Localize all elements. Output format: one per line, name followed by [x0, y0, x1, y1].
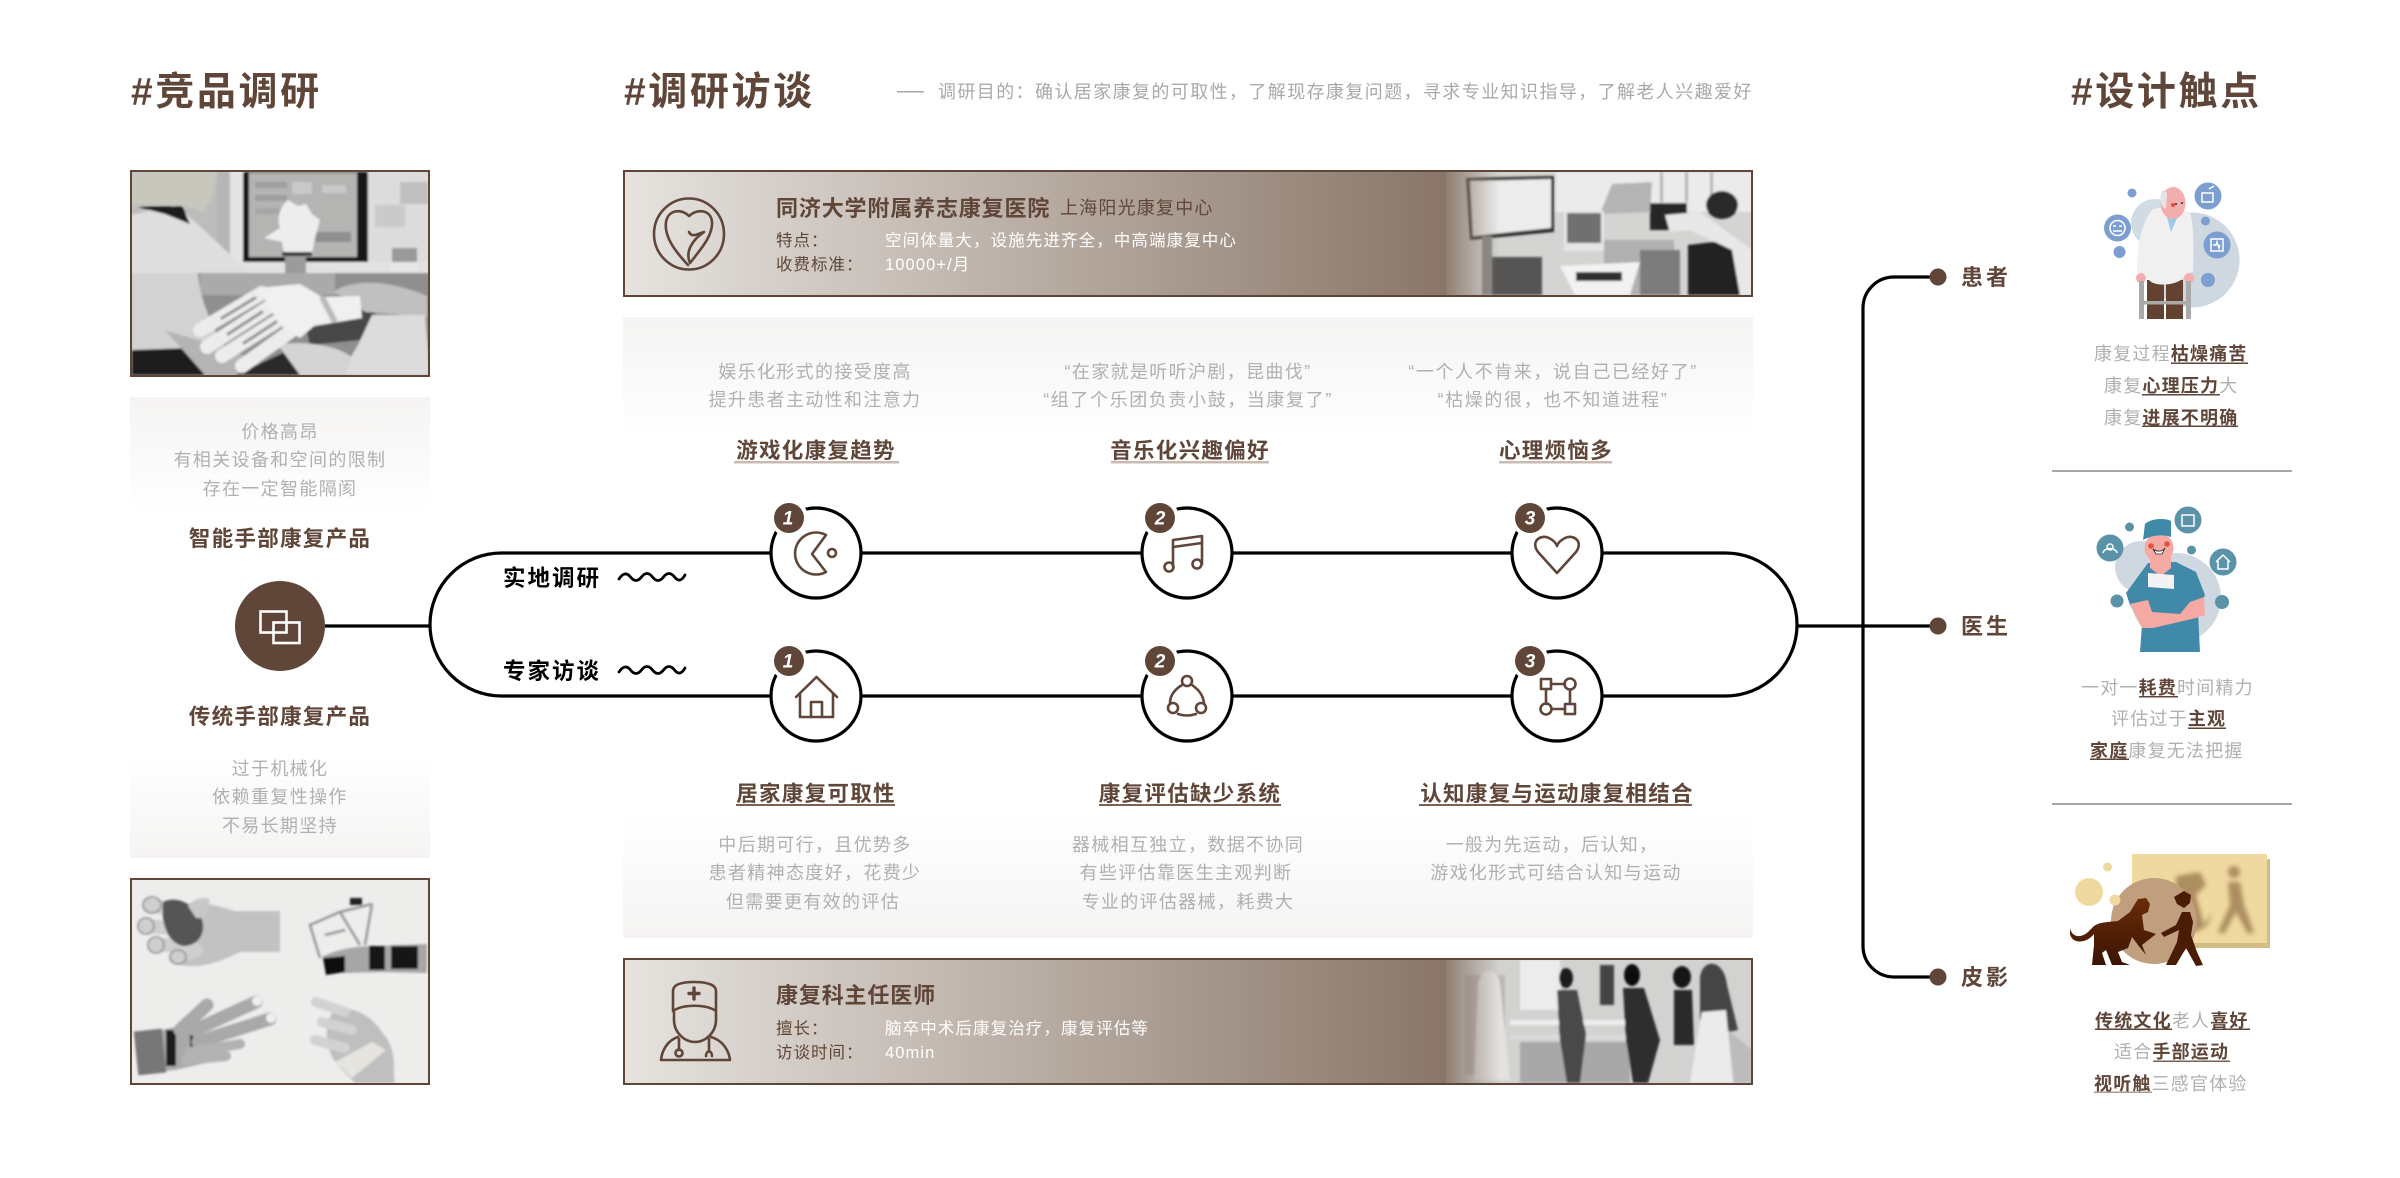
- panel: traditional product drawbacks: [130, 758, 430, 858]
- text: interview finding 2: 专业的评估器械，耗费大: [1082, 892, 1294, 912]
- text: shadow puppetry benefits: 适合手部运动: [2114, 1041, 2229, 1062]
- text: shadow puppetry benefits: 传统文化老人喜好: [2095, 1010, 2249, 1031]
- panel: field research findings background: [623, 317, 1753, 437]
- node: heart icon 3: 3: [1525, 508, 1536, 530]
- text: shadow puppetry benefits: 视听触三感官体验: [2094, 1074, 2248, 1094]
- illustration: doctor with crossed arms: [2096, 506, 2236, 652]
- text: traditional product drawbacks: [212, 759, 348, 836]
- text: field finding 1: 游戏化康复趋势: [736, 438, 896, 463]
- heading: competitor research: #竞品调研: [131, 71, 322, 114]
- node: flow nodes icon 3: 3: [1525, 652, 1536, 672]
- text: doctor pain points: 一对一耗费时间精力: [2081, 678, 2254, 698]
- node: house icon 1: 1: [783, 652, 793, 672]
- text: interview finding 1: 居家康复可取性: [736, 781, 896, 806]
- text: interview finding 2: 有些评估靠医生主观判断: [1080, 863, 1292, 883]
- text: traditional product drawbacks: 不易长期坚持: [222, 816, 338, 836]
- label: shadow puppetry: [1930, 965, 2011, 990]
- photo: smart hand rehab gloves: [130, 170, 430, 377]
- node: game icon 1: 1: [783, 508, 793, 530]
- text: doctor pain points: [2081, 678, 2254, 761]
- text: field finding 2: “在家就是听听沪剧，昆曲伐”: [1065, 362, 1311, 382]
- node: cycle icon 2: [1141, 642, 1232, 741]
- text: patient pain points: 康复心理压力大: [2104, 376, 2238, 396]
- node: cycle icon 2: 2: [1154, 652, 1166, 672]
- text: field finding 1: 提升患者主动性和注意力: [709, 390, 921, 410]
- text: interview finding 1: 但需要更有效的评估: [726, 892, 900, 912]
- text: smart product drawbacks: 价格高昂: [241, 422, 319, 442]
- text: interview finding 2: [1072, 781, 1304, 912]
- node: music icon 2: [1141, 499, 1232, 598]
- label: patient: 患者: [1961, 265, 2011, 290]
- illustration: elderly patient with walker: [2104, 182, 2240, 319]
- text: field finding 2: [1043, 362, 1333, 464]
- label: field research: 实地调研: [503, 565, 601, 591]
- text: hospital name and details: 同济大学附属养志康复医院: [776, 196, 1050, 221]
- text: director details: 擅长：: [776, 1019, 828, 1038]
- text: hospital name and details: 收费标准：: [776, 255, 864, 274]
- node: heart icon 3: [1511, 499, 1602, 598]
- text: hospital name and details: 10000+/月: [885, 256, 970, 274]
- label: traditional hand rehab products: 传统手部康复产品: [189, 704, 371, 729]
- label: field research: [503, 565, 685, 591]
- text: director details: 访谈时间：: [776, 1043, 864, 1062]
- text: smart product drawbacks: 有相关设备和空间的限制: [174, 450, 386, 470]
- icon: doctor: [661, 982, 730, 1060]
- text: hospital name and details: 空间体量大，设施先进齐全，中高端康复中心: [885, 231, 1237, 250]
- text: hospital name and details: 上海阳光康复中心: [1060, 198, 1214, 218]
- text: shadow puppetry benefits: [2094, 1010, 2250, 1094]
- text: interview finding 1: 中后期可行，且优势多: [718, 835, 912, 855]
- icon: heart logo: [654, 198, 724, 270]
- text: interview finding 3: 认知康复与运动康复相结合: [1420, 781, 1694, 806]
- text: interview finding 3: [1419, 781, 1694, 883]
- text: smart product drawbacks: [174, 422, 386, 499]
- text: interview finding 3: 一般为先运动，后认知，: [1446, 835, 1658, 855]
- label: expert interviews: [503, 658, 685, 684]
- node: music icon 2: 2: [1154, 508, 1166, 530]
- panel: smart product drawbacks: [130, 397, 430, 512]
- text: patient pain points: [2094, 343, 2248, 428]
- text: doctor pain points: 家庭康复无法把握: [2090, 740, 2244, 761]
- icon: overlapping squares node: [235, 581, 325, 671]
- photo: traditional hand rehab devices: [130, 878, 430, 1085]
- label: patient: [1930, 265, 2011, 290]
- text: traditional product drawbacks: 依赖重复性操作: [212, 787, 348, 807]
- text: director details: 40min: [885, 1044, 935, 1062]
- node: game icon 1: [770, 499, 861, 598]
- illustration: shadow puppet figures: [2070, 854, 2270, 966]
- text: field finding 3: [1408, 362, 1698, 464]
- text: field finding 1: 娱乐化形式的接受度高: [718, 362, 912, 382]
- text: smart product drawbacks: 存在一定智能隔阂: [203, 479, 357, 499]
- node: house icon 1: [770, 642, 861, 741]
- panel: expert interview findings background: [623, 815, 1753, 938]
- text: interview finding 1: 患者精神态度好，花费少: [709, 863, 921, 883]
- text: interview finding 3: 游戏化形式可结合认知与运动: [1430, 863, 1682, 883]
- text: field finding 3: 心理烦恼多: [1499, 439, 1613, 463]
- text: hospital name and details: 特点：: [776, 231, 828, 250]
- text: field finding 1: [709, 362, 921, 464]
- text: doctor pain points: 评估过于主观: [2111, 709, 2226, 729]
- text: traditional product drawbacks: 过于机械化: [232, 759, 328, 779]
- label: doctor: [1930, 614, 2011, 639]
- text: interview finding 1: [709, 781, 921, 912]
- connector: flow lines: [325, 277, 1930, 977]
- text: hospital name and details: [776, 196, 1237, 274]
- text: director details: 康复科主任医师: [776, 983, 936, 1008]
- text: director details: 脑卒中术后康复治疗，康复评估等: [885, 1019, 1149, 1038]
- node: flow nodes icon 3: [1511, 642, 1602, 741]
- text: director details: [776, 983, 1149, 1062]
- text: field finding 3: “枯燥的很，也不知道进程”: [1438, 390, 1668, 410]
- text: patient pain points: 康复进展不明确: [2104, 408, 2238, 428]
- photo: hospital rehab equipment: [1446, 172, 1751, 295]
- text: field finding 2: 音乐化兴趣偏好: [1110, 438, 1270, 463]
- heading: design touchpoints: #设计触点: [2071, 71, 2262, 114]
- text: interview finding 2: 康复评估缺少系统: [1099, 781, 1281, 806]
- label: shadow puppetry: 皮影: [1961, 965, 2011, 990]
- text: patient pain points: 康复过程枯燥痛苦: [2094, 343, 2248, 364]
- text: interview finding 2: 器械相互独立，数据不协同: [1072, 835, 1304, 855]
- text: field finding 3: “一个人不肯来，说自己已经好了”: [1408, 362, 1698, 382]
- label: smart hand rehab products: 智能手部康复产品: [189, 526, 371, 551]
- heading: research interviews: #调研访谈: [624, 71, 815, 114]
- text: field finding 2: “组了个乐团负责小鼓，当康复了”: [1043, 390, 1333, 410]
- banner: rehabilitation department director: [623, 958, 1753, 1085]
- photo: interview with doctors: [1446, 960, 1751, 1083]
- label: doctor: 医生: [1961, 614, 2011, 639]
- research purpose note: 调研目的：确认居家康复的可取性，了解现存康复问题，寻求专业知识指导，了解老人兴趣爱好: [938, 82, 1753, 102]
- label: expert interviews: 专家访谈: [503, 658, 601, 684]
- banner: Tongji Yangzhi rehabilitation hospital: [623, 170, 1753, 297]
